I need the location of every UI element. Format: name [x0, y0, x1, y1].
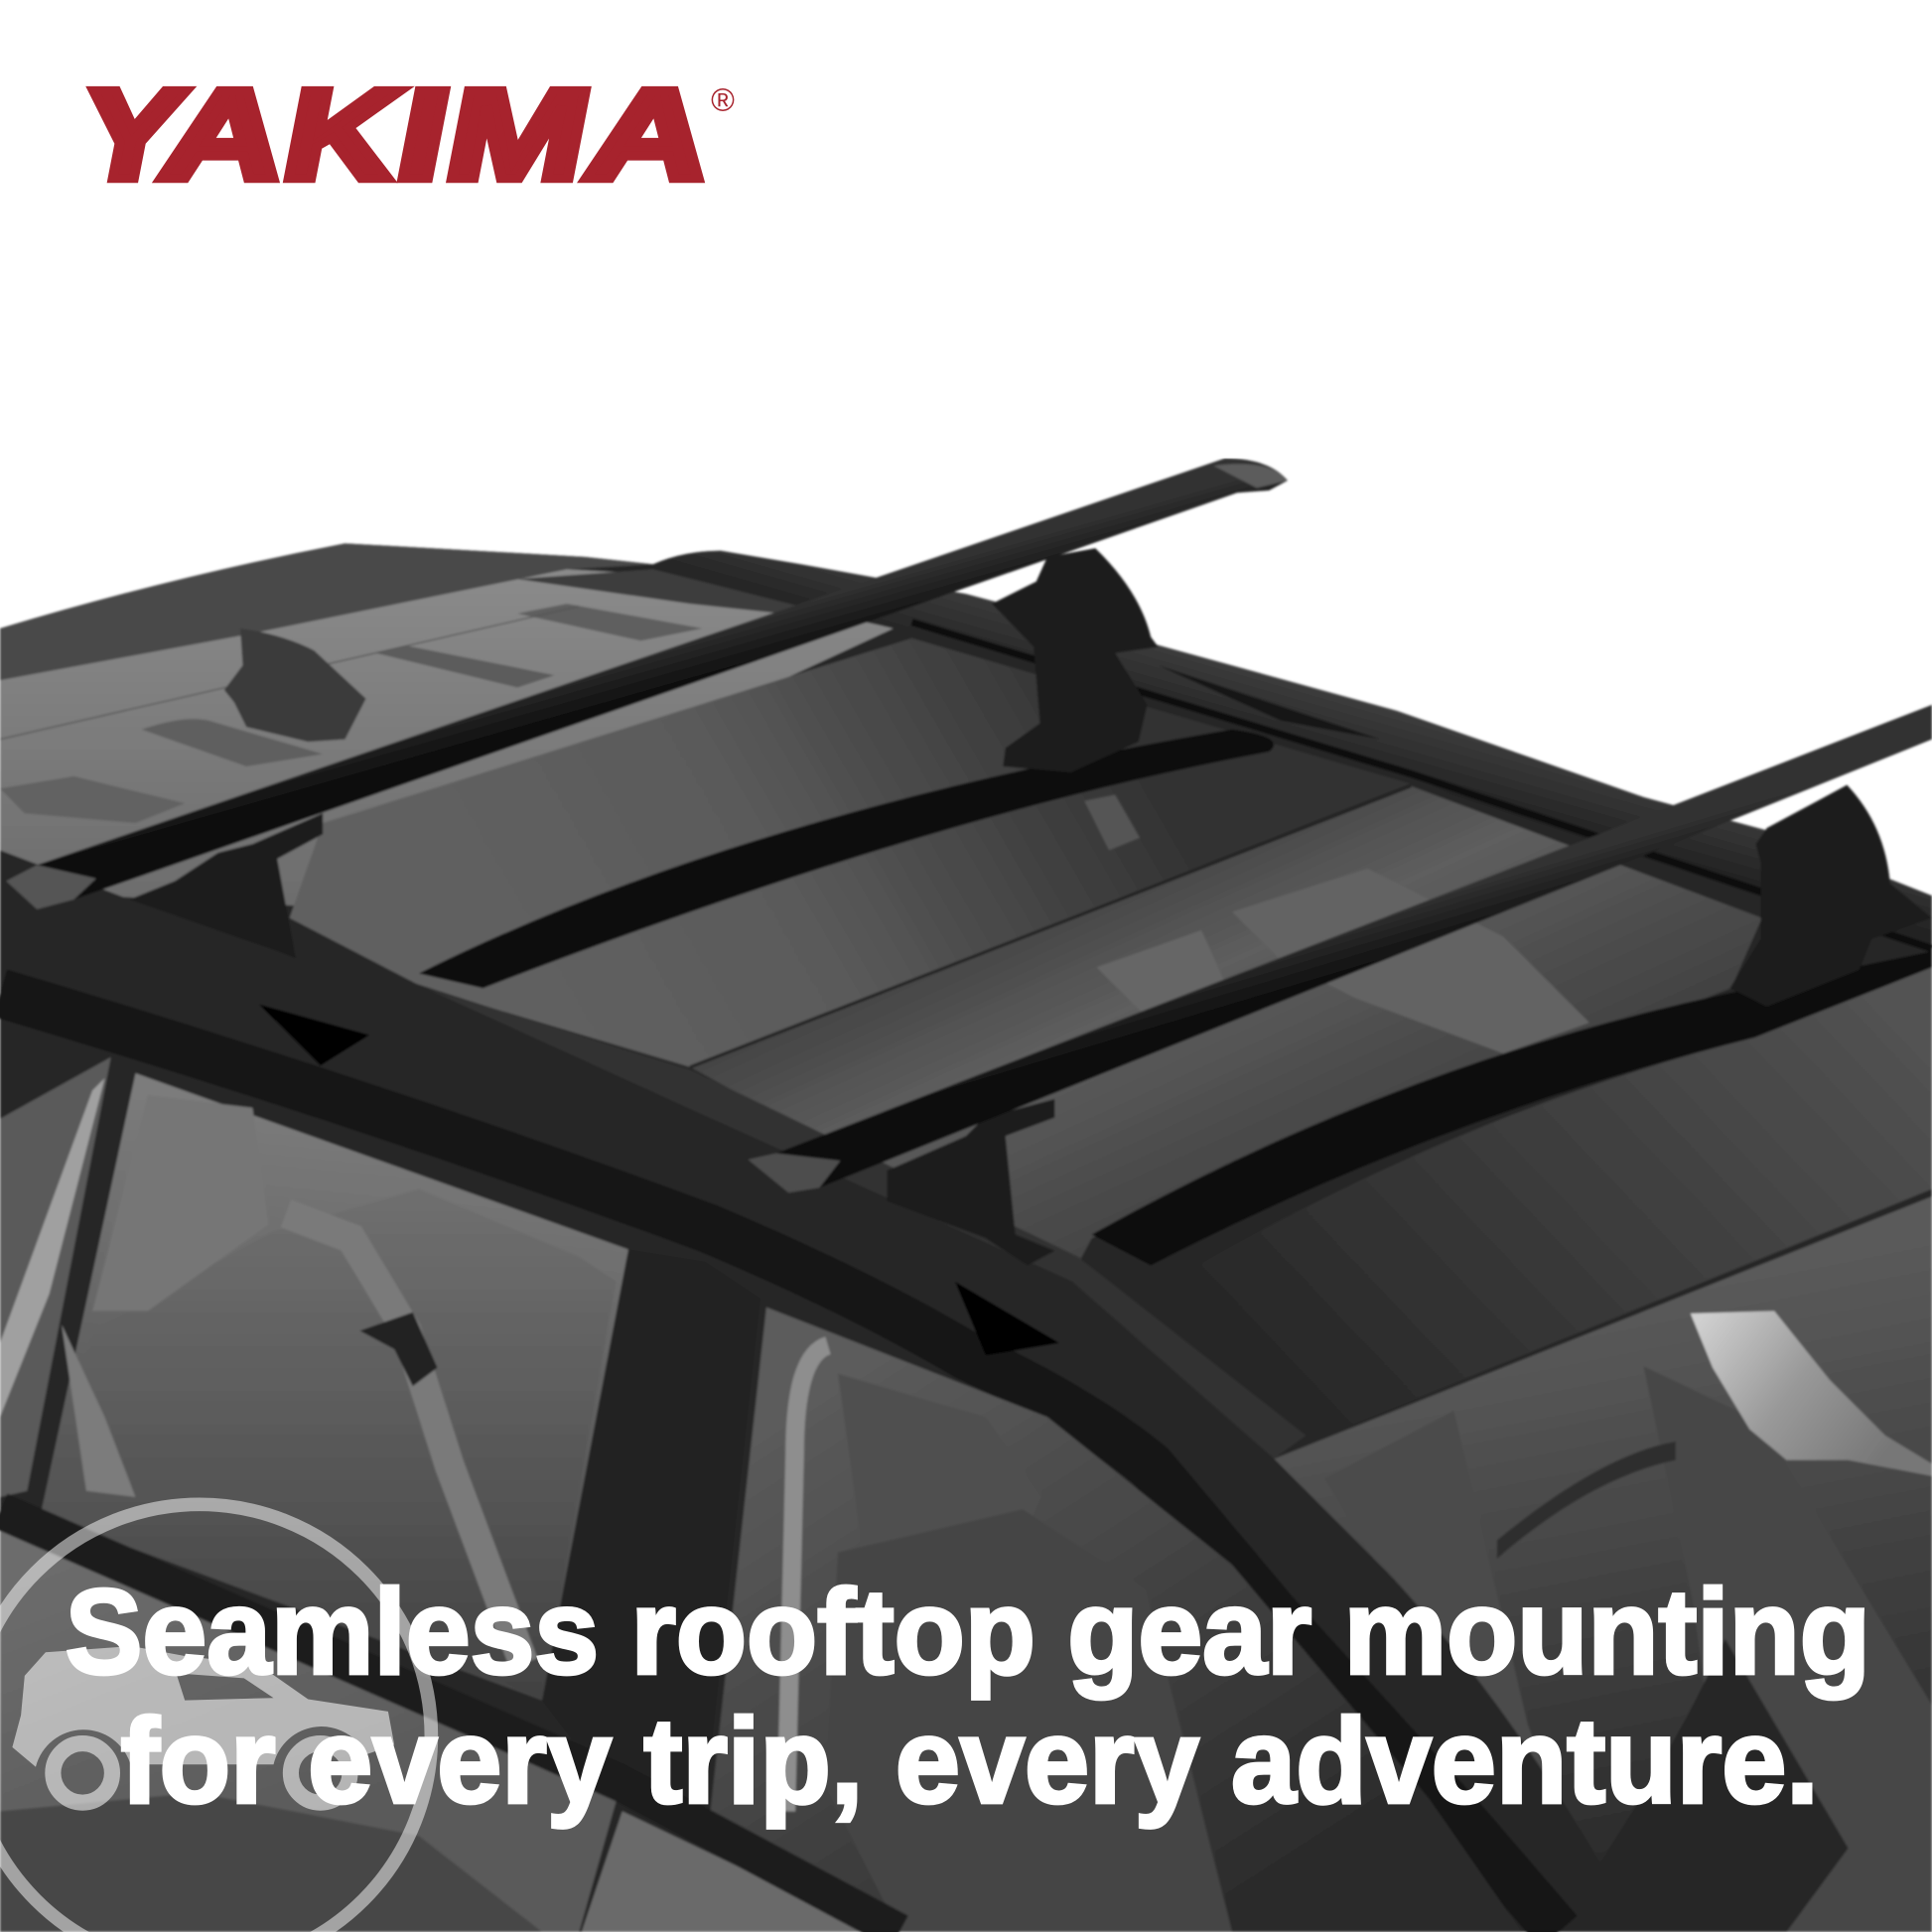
icon ring: [0, 1504, 431, 1932]
logo: Yakima: K: [273, 63, 412, 207]
icon wheels: [53, 1743, 349, 1803]
far rear small window: [0, 1057, 136, 1497]
rear glossy roof: [0, 569, 894, 905]
shark fin antenna: [224, 628, 366, 742]
door panels: [0, 1511, 899, 1932]
near side roof rail: [0, 905, 1639, 1932]
front roof panel: [1170, 967, 1932, 1456]
front side window: [709, 1308, 1522, 1932]
foot far rear: [992, 548, 1159, 772]
foot far front: [1729, 785, 1932, 1007]
belt buckle: [359, 1312, 438, 1386]
cabin reflections on glass: [1084, 794, 1589, 1053]
icon car body: [12, 1646, 394, 1767]
crossbar rear: [6, 459, 1288, 909]
foot near front: [888, 1099, 1054, 1266]
logo: Yakima: Y: [69, 63, 195, 207]
logo: Yakima: A: [576, 63, 725, 207]
crossbar front: [748, 705, 1932, 1192]
icon: car in circle: [0, 1504, 431, 1932]
foot near rear: [129, 813, 323, 959]
car body silhouette: [0, 543, 1932, 1932]
far side roof rail: [653, 551, 1932, 951]
rear seat: [41, 1189, 617, 1698]
sunroof front glass panel: [690, 786, 1762, 1276]
B pillar: [542, 1249, 760, 1829]
logo: Yakima: A: [151, 63, 300, 207]
logo: Yakima: I: [386, 63, 462, 207]
headline: for every trip, every adventure.: [121, 1694, 1819, 1829]
rear roof dark band: [0, 543, 653, 680]
logo: Yakima: ®: [711, 82, 735, 118]
car photo: [0, 459, 1932, 1932]
windshield: [1274, 1196, 1932, 1932]
panel seam line: [690, 786, 1411, 1067]
rear headrest: [92, 1095, 269, 1311]
logo: Yakima: [69, 63, 735, 207]
rack feet: [129, 548, 1932, 1266]
headline: Seamless rooftop gear mounting: [66, 1564, 1870, 1699]
sunroof rear glass panel: [290, 638, 1411, 1067]
rear side window: [41, 1073, 628, 1701]
seat belt: [286, 1213, 523, 1663]
logo: Yakima: M: [436, 63, 602, 207]
black shadow arcs: [419, 730, 1932, 1266]
headline: [66, 1564, 1870, 1829]
